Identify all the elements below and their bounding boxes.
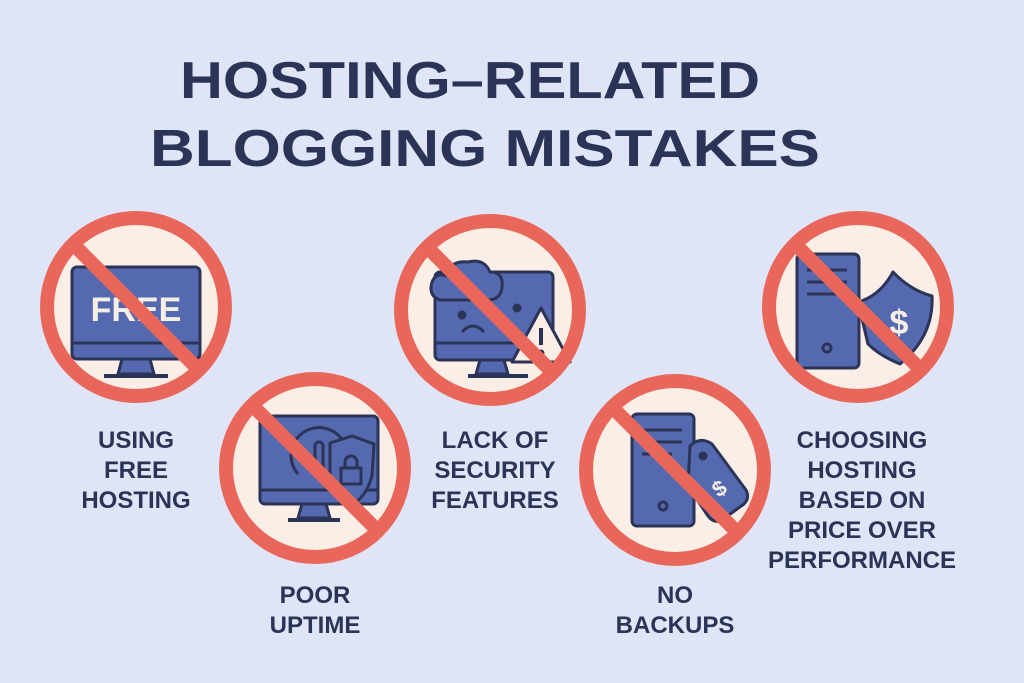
label: HOSTING [81,487,191,514]
icon: server with dollar shield: $ [890,304,909,342]
icon: server with price tag [632,414,748,526]
label: UPTIME [270,612,360,639]
icon: monitor with FREE [72,267,200,376]
title: HOSTING–RELATED [180,52,760,110]
label: POOR [280,582,350,609]
label [270,582,360,639]
label: NO [657,582,693,609]
label: FREE [104,457,168,484]
panel: lack of security features [400,220,580,514]
icon: monitor with shield [260,416,378,520]
label: PRICE OVER [788,517,936,544]
label [768,427,956,574]
title [150,52,820,178]
label: BASED ON [799,487,925,514]
label [616,582,734,639]
label: CHOOSING [797,427,927,454]
icon: sad monitor with cloud and warning [431,261,570,376]
panel: using free hosting [46,217,226,514]
label [81,427,191,514]
panel: no backups [585,380,765,639]
label: LACK OF [442,427,548,454]
label: FEATURES [431,487,559,514]
panel: price over performance [768,217,956,574]
label: HOSTING [807,457,917,484]
panel: poor uptime [225,378,405,639]
label: SECURITY [434,457,556,484]
title: BLOGGING MISTAKES [150,120,820,178]
label [431,427,559,514]
label: PERFORMANCE [768,547,956,574]
icon: monitor with FREE: FREE [91,291,181,329]
icon: server with dollar shield [797,254,932,368]
icon: server with price tag: $ [707,475,731,502]
label: BACKUPS [616,612,734,639]
label: USING [98,427,174,454]
